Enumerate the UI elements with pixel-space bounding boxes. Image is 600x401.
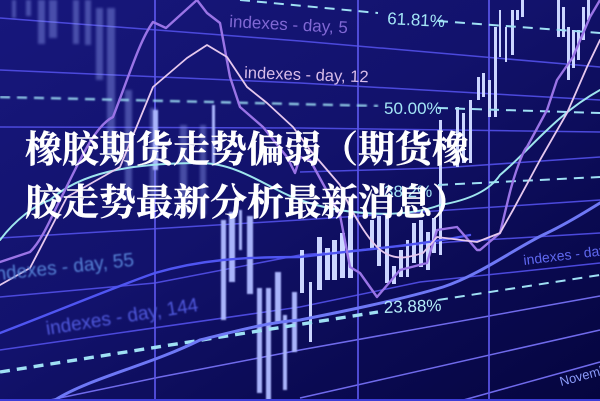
label: 61.81%: 61.81%	[387, 9, 445, 31]
candlesticks, right	[300, 0, 590, 342]
label: indexes day 5: indexes - day, 5	[229, 12, 348, 37]
title: 橡胶期货走势偏弱（期货橡	[25, 130, 469, 171]
label: 38.2%: 38.2%	[384, 182, 432, 201]
bottom edge strip	[0, 399, 600, 401]
thick blue trend lines	[0, 203, 600, 400]
teal arch line	[0, 90, 600, 240]
candlesticks, centre	[153, 105, 297, 400]
label: 50.00%: 50.00%	[384, 99, 442, 118]
title: 胶走势最新分析最新消息）	[25, 183, 469, 224]
title	[25, 130, 469, 224]
pale day 12 line	[0, 40, 600, 285]
label: indexes day 144: indexes - day, 144	[44, 295, 200, 340]
candlesticks, blurred far left	[12, 0, 206, 215]
moving average curves	[0, 0, 600, 297]
purple day 5 line	[0, 0, 600, 297]
label: indexes day 12: indexes - day, 12	[244, 64, 369, 86]
label: 23.88%: 23.88%	[383, 296, 442, 317]
